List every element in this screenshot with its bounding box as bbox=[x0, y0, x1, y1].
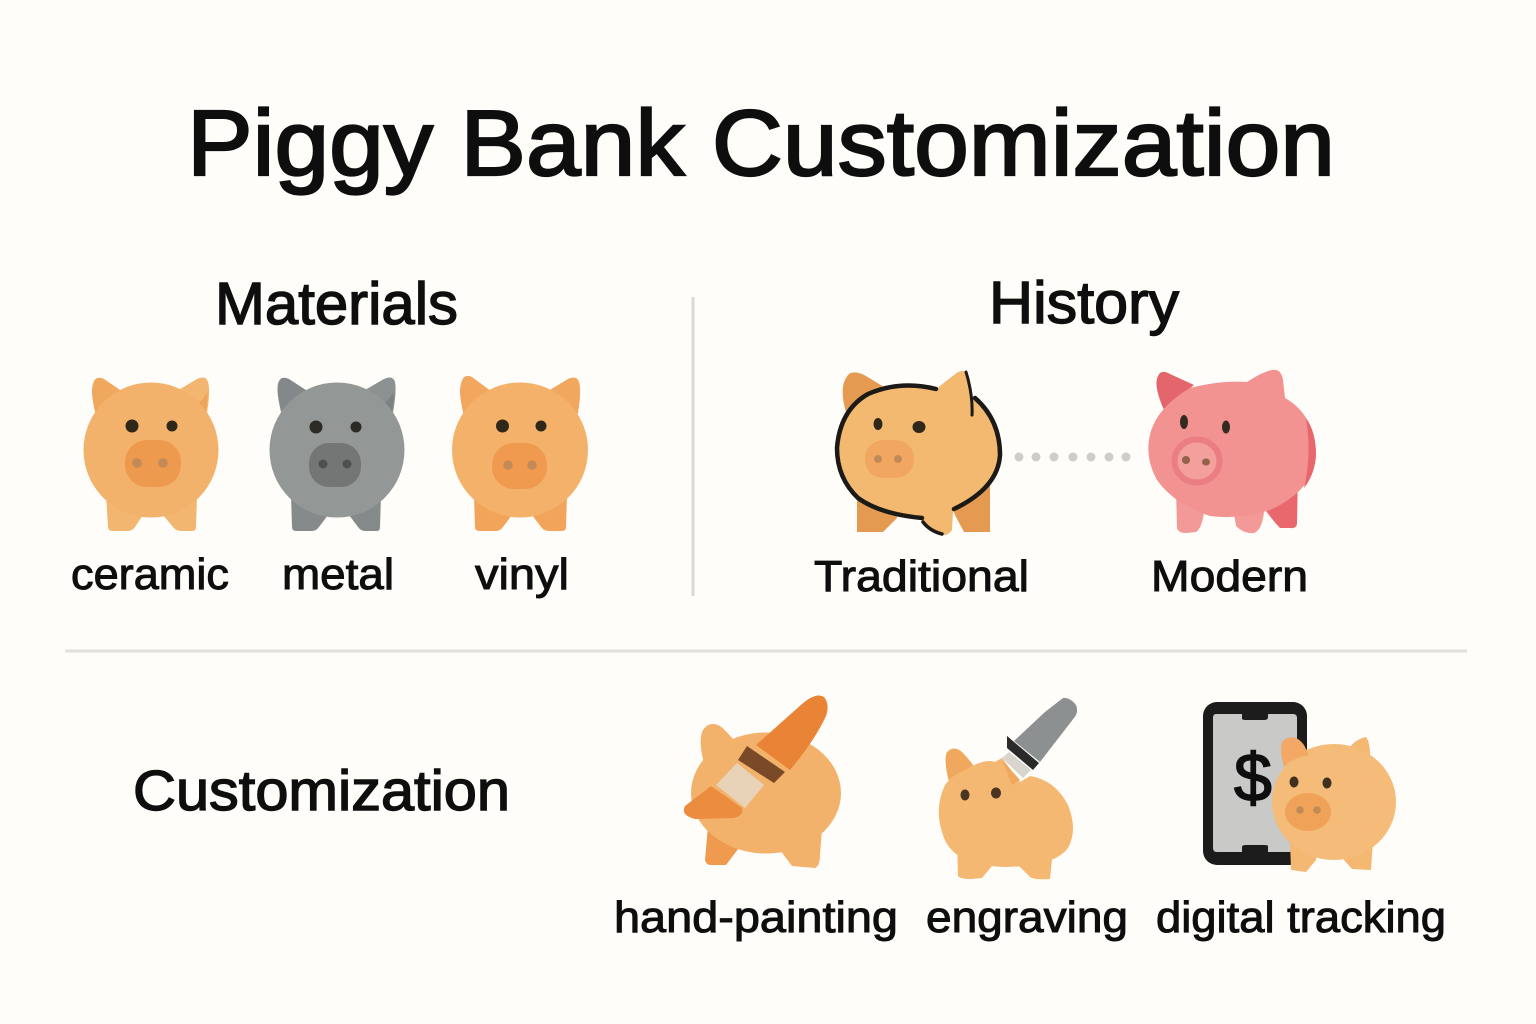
icon: phone and pig, digital tracking bbox=[1203, 702, 1396, 872]
icon: vinyl pig bbox=[452, 376, 588, 531]
label: vinyl: vinyl bbox=[475, 550, 569, 599]
label: Traditional: Traditional bbox=[814, 552, 1029, 601]
label: Modern: Modern bbox=[1151, 552, 1308, 601]
title: Piggy Bank Customization bbox=[187, 91, 1335, 195]
label: engraving: engraving bbox=[926, 893, 1128, 942]
icon: hand-painting pig with brush bbox=[684, 696, 841, 868]
label: digital tracking: digital tracking bbox=[1156, 893, 1446, 942]
heading: Customization: Customization bbox=[133, 759, 510, 823]
icon: phone and pig, digital tracking: $ bbox=[1234, 740, 1272, 816]
icon: metal pig bbox=[270, 378, 404, 531]
connector: dotted line bbox=[1014, 452, 1130, 462]
icon: modern pig bbox=[1148, 370, 1316, 533]
heading: History: History bbox=[989, 270, 1180, 336]
label: metal: metal bbox=[282, 550, 394, 599]
icon: ceramic pig bbox=[84, 378, 218, 531]
label: ceramic: ceramic bbox=[71, 550, 229, 599]
heading: Materials: Materials bbox=[215, 271, 458, 337]
label: hand-painting: hand-painting bbox=[614, 893, 898, 942]
icon: engraving pig with tool bbox=[939, 698, 1077, 879]
icon: traditional pig bbox=[837, 371, 1000, 535]
